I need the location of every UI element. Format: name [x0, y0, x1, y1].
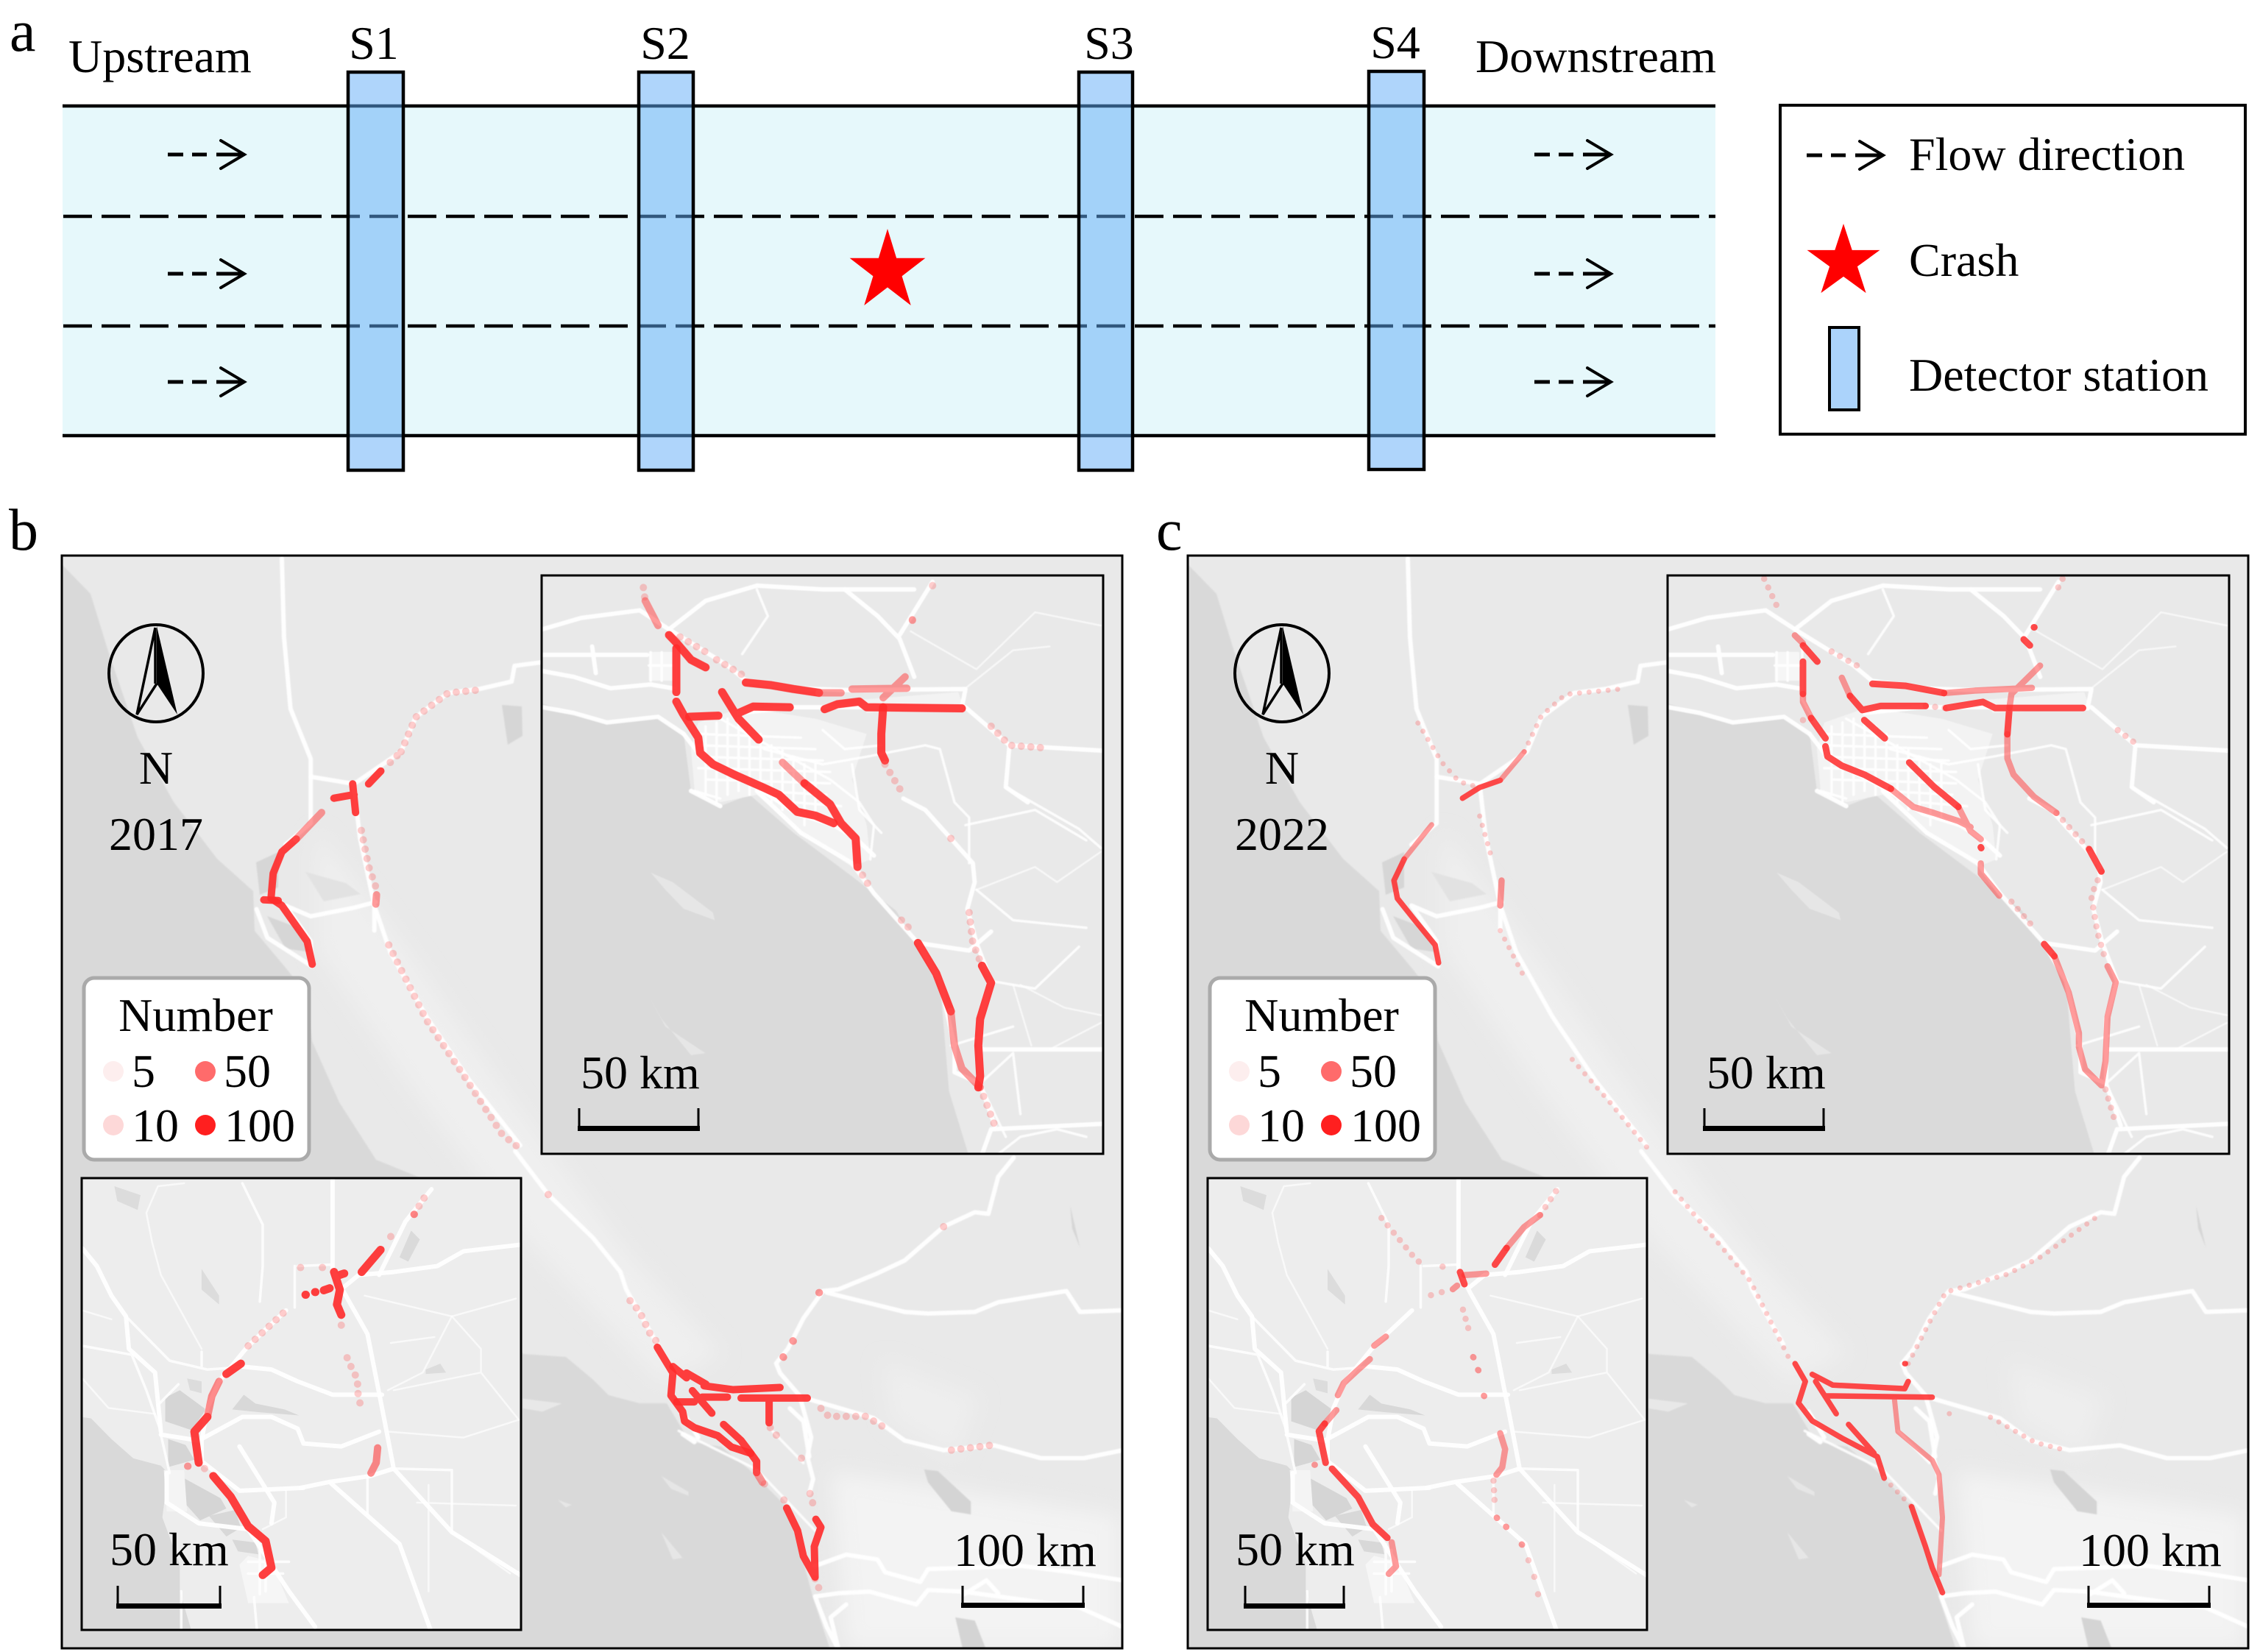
year 2022: 2022	[1235, 808, 1329, 860]
scale bar inset b bottom: 50 km	[110, 1523, 229, 1575]
road edge bottom	[63, 434, 1715, 437]
crash star	[850, 229, 925, 305]
station S2	[639, 17, 693, 470]
legend detector rectangle	[1829, 327, 1859, 410]
number legend b: Number	[118, 989, 273, 1041]
panel a label: a	[10, 0, 36, 64]
upstream label: Upstream	[68, 30, 252, 82]
lane divider lower	[63, 325, 1715, 327]
number legend b: 10	[132, 1099, 179, 1152]
crash routes main c	[1394, 689, 2097, 1592]
number legend b: 50	[224, 1045, 271, 1097]
panel b: 2017 map	[44, 545, 1148, 1652]
number legend b: 100	[224, 1099, 295, 1152]
station S1	[348, 17, 403, 470]
base map c	[1170, 545, 2260, 1652]
scale bar b main	[954, 1524, 1097, 1608]
legend: diagram	[1780, 105, 2245, 434]
scale bar inset c top: 50 km	[1707, 1046, 1826, 1099]
inset b top right	[540, 574, 1104, 1155]
north label c: N	[1265, 742, 1299, 794]
north label b: N	[139, 742, 173, 794]
inset c top right	[1666, 574, 2230, 1155]
legend crash text: Crash	[1909, 234, 2019, 286]
legend star	[1807, 224, 1880, 293]
scale bar inset b bottom	[110, 1523, 229, 1609]
station S4	[1369, 16, 1424, 469]
panel a: road diagram	[63, 16, 1716, 470]
year 2017: 2017	[109, 808, 203, 860]
station S4: S4	[1370, 16, 1420, 68]
scale bar inset c top	[1703, 1046, 1826, 1131]
legend flow text: Flow direction	[1909, 128, 2185, 180]
scale bar inset b top: 50 km	[581, 1046, 700, 1099]
station S3	[1079, 17, 1134, 470]
flow arrows downstream	[1534, 141, 1611, 396]
scale bar c main	[2079, 1524, 2222, 1608]
number legend c: 5	[1258, 1045, 1281, 1097]
legend flow arrow	[1807, 141, 1883, 169]
inset b bottom left	[81, 1177, 523, 1631]
inset c bottom left	[1207, 1177, 1648, 1631]
scale bar inset c bottom: 50 km	[1236, 1523, 1355, 1575]
lane divider upper	[63, 215, 1715, 218]
number legend c: 10	[1258, 1099, 1305, 1152]
number legend c	[1210, 978, 1435, 1160]
crash routes main b	[263, 690, 991, 1593]
number legend b: 5	[132, 1045, 155, 1097]
base map b	[44, 545, 1148, 1652]
panel b label: b	[9, 498, 38, 563]
crash routes inset c bottom	[1314, 1191, 1556, 1595]
number legend b	[84, 978, 309, 1160]
crash routes inset c top	[1764, 579, 2134, 1124]
scale bar inset b top	[578, 1046, 700, 1131]
number legend c: 50	[1350, 1045, 1397, 1097]
panel b frame	[62, 556, 1122, 1648]
number legend c: Number	[1244, 989, 1399, 1041]
station S2: S2	[640, 17, 690, 69]
crash routes inset b bottom	[188, 1191, 428, 1575]
panel c label: c	[1156, 498, 1183, 563]
scale bar c main: 100 km	[2079, 1524, 2222, 1576]
panel c: 2022 map	[1170, 545, 2260, 1652]
north arrow c	[1235, 625, 1329, 722]
crash routes inset b top	[643, 586, 1049, 1125]
panel c frame	[1188, 556, 2248, 1648]
legend detector text: Detector station	[1909, 349, 2208, 401]
road edge top	[63, 104, 1715, 107]
road surface	[63, 105, 1715, 434]
north arrow b	[109, 625, 203, 722]
station S3: S3	[1084, 17, 1134, 69]
number legend c: 100	[1350, 1099, 1421, 1152]
downstream label: Downstream	[1476, 30, 1716, 82]
flow arrows upstream	[168, 141, 244, 396]
scale bar b main: 100 km	[954, 1524, 1097, 1576]
station S1: S1	[349, 17, 399, 69]
scale bar inset c bottom	[1236, 1523, 1355, 1609]
